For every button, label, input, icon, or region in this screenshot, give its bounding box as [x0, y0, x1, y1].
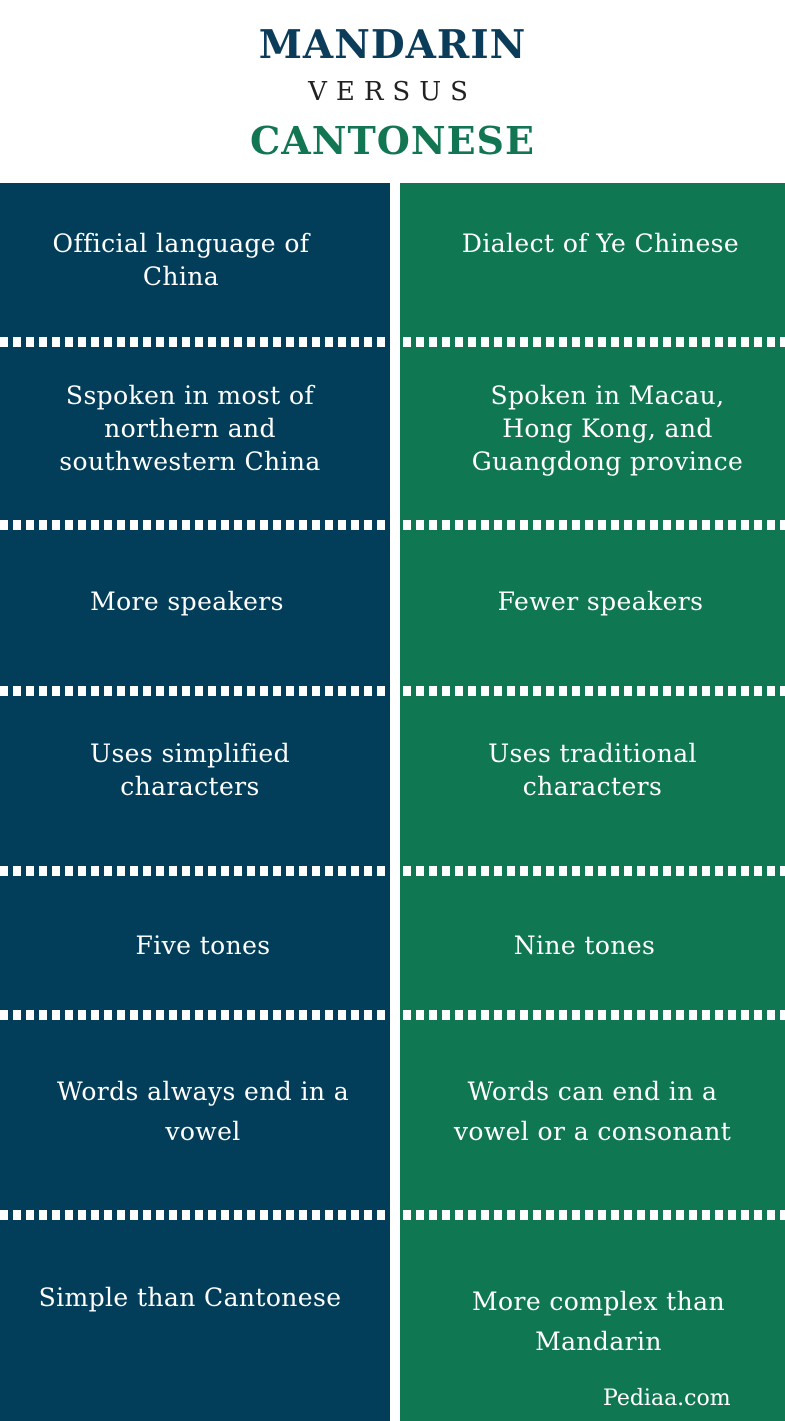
panel: cantonese column: [400, 183, 785, 1421]
text: cantonese row 1: Dialect of Ye Chinese: [462, 229, 739, 258]
text: cantonese row 2: [472, 381, 743, 476]
text: cantonese row 7: [472, 1287, 725, 1356]
text: cantonese row 6: Words can end in a: [468, 1077, 717, 1106]
text: mandarin row 4: Uses simplified: [90, 739, 290, 768]
text: cantonese row 5: Nine tones: [514, 931, 655, 960]
text: cantonese row 4: Uses traditional: [488, 739, 697, 768]
title: mandarin: MANDARIN: [259, 22, 526, 68]
title: cantonese: CANTONESE: [250, 118, 535, 163]
text: mandarin row 6: [57, 1077, 349, 1146]
panel: mandarin column: [0, 183, 390, 1421]
text: mandarin row 4: [90, 739, 290, 801]
text: cantonese row 2: Spoken in Macau,: [490, 381, 725, 410]
text: mandarin row 6: Words always end in a: [57, 1077, 349, 1106]
text: mandarin row 6: vowel: [165, 1117, 241, 1146]
text: mandarin row 1: China: [143, 262, 219, 291]
text: cantonese row 2: Hong Kong, and: [502, 414, 713, 443]
text: mandarin row 1: Official language of: [53, 229, 309, 258]
text: cantonese row 2: Guangdong province: [472, 447, 743, 476]
text: mandarin row 2: southwestern China: [59, 447, 321, 476]
text: mandarin row 7: Simple than Cantonese: [39, 1283, 341, 1312]
text: mandarin row 1: [53, 229, 310, 291]
text: cantonese row 7: More complex than: [472, 1287, 725, 1316]
logo: pediaa.com: Pediaa.com: [603, 1386, 731, 1411]
text: mandarin row 2: [59, 381, 321, 476]
text: mandarin row 2: northern and: [104, 414, 276, 443]
text: cantonese row 4: [488, 739, 697, 801]
subtitle: versus: VERSUS: [308, 77, 477, 107]
text: cantonese row 4: characters: [523, 772, 662, 801]
text: mandarin row 5: Five tones: [135, 931, 271, 960]
text: mandarin row 4: characters: [120, 772, 260, 801]
text: cantonese row 7: Mandarin: [535, 1327, 662, 1356]
text: mandarin row 3: More speakers: [90, 587, 284, 616]
text: cantonese row 3: Fewer speakers: [498, 587, 703, 616]
text: mandarin row 2: Sspoken in most of: [66, 381, 314, 410]
text: cantonese row 6: [454, 1077, 731, 1146]
text: cantonese row 6: vowel or a consonant: [454, 1117, 731, 1146]
